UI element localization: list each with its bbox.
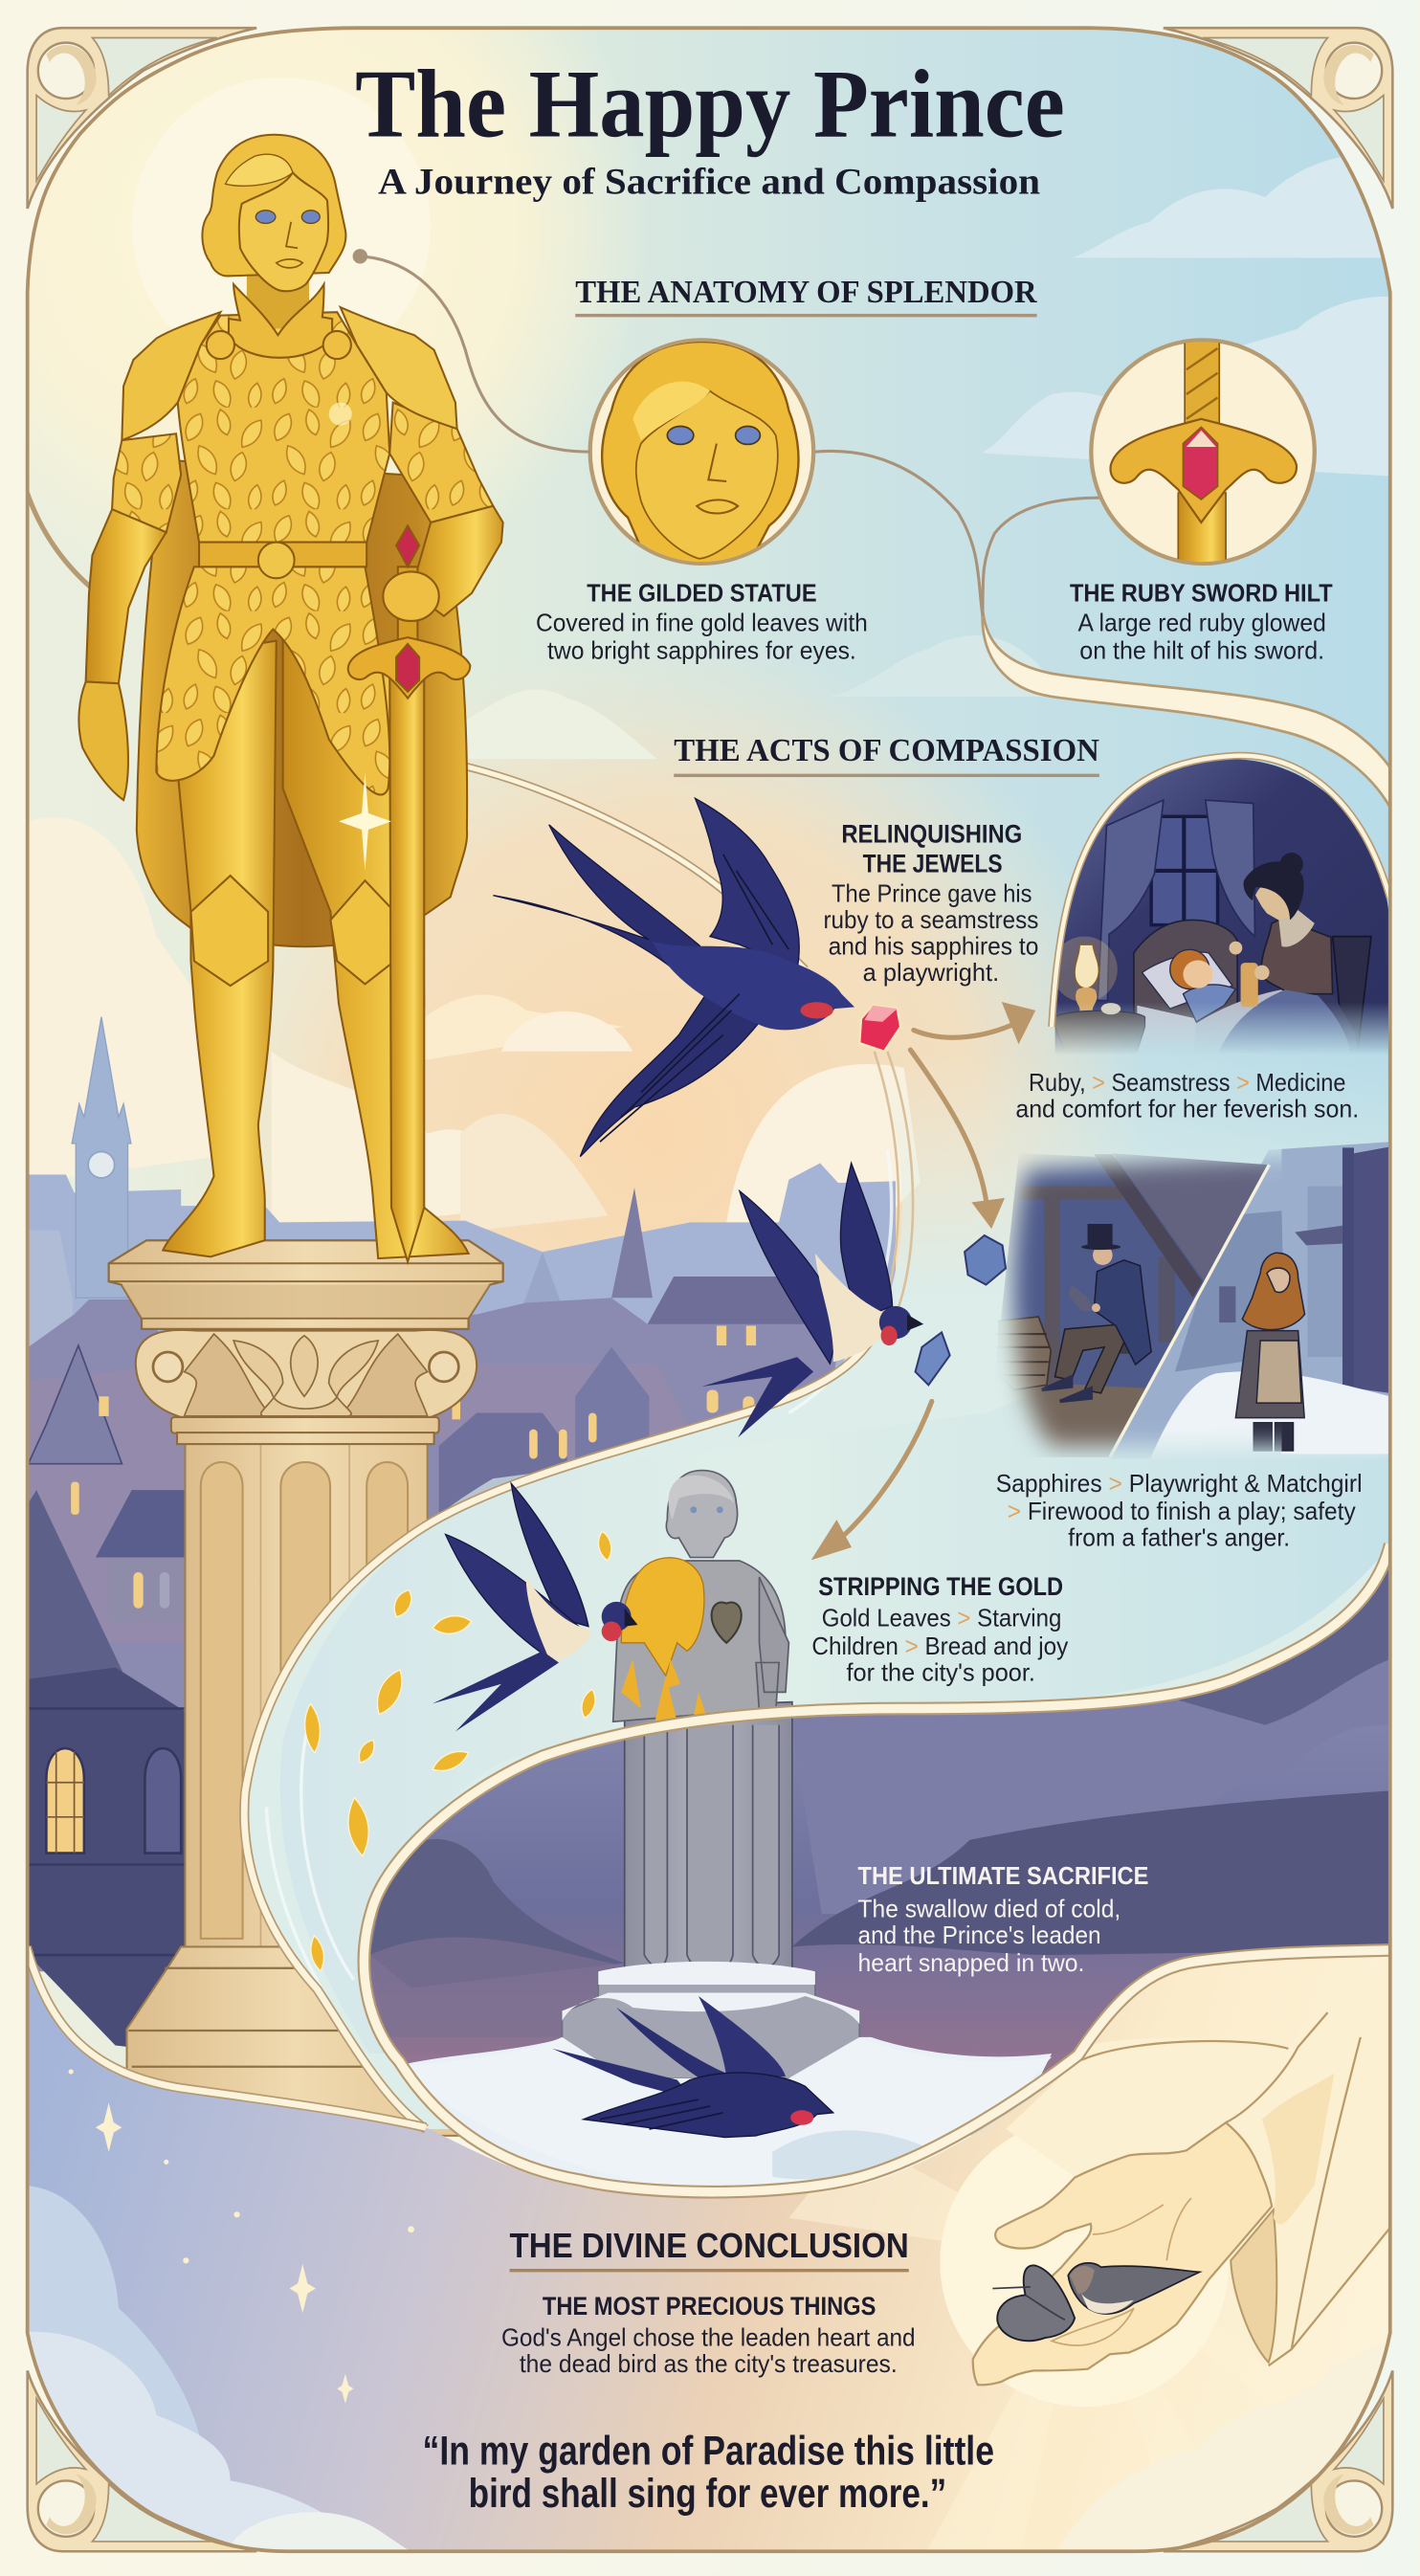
hair sweep (226, 154, 293, 186)
belt (199, 543, 366, 566)
mother dress (1261, 919, 1333, 994)
hanging sign (1295, 1226, 1342, 1245)
sword grip (398, 566, 417, 654)
horizontal beam (1019, 1187, 1122, 1199)
playwright trousers (1055, 1324, 1125, 1393)
bottom right ornament (1164, 2370, 1392, 2551)
text: relinquishing: RELINQUISHING (841, 820, 1022, 849)
snow drift (400, 2037, 1052, 2188)
cape (137, 460, 467, 946)
inner S ribbon (27, 1052, 1390, 2192)
playwright coat (1094, 1260, 1151, 1365)
medallion grip (1185, 337, 1219, 438)
sleeve fold (1231, 2210, 1276, 2363)
top hat (1088, 1224, 1113, 1247)
lower-left ribbon (27, 1946, 426, 2127)
books (996, 1317, 1051, 1389)
text: ruby sword hilt: THE RUBY SWORD HILT (1070, 580, 1333, 607)
right side houses (439, 1412, 567, 1627)
withered statue (400, 1471, 1052, 2188)
text: ruby result: and comfort for her feverish son. (1015, 1096, 1359, 1122)
pedestal (109, 1240, 503, 2136)
text: ruby result (1015, 1070, 1359, 1122)
medallion: gilded face (590, 340, 813, 566)
text: stripping the gold: for the city's poor. (846, 1659, 1035, 1686)
stars (69, 2069, 414, 2404)
city skyline (29, 1017, 896, 2054)
outer S ribbon (244, 1339, 871, 2129)
child (1183, 985, 1235, 1022)
street house (1175, 1210, 1285, 1372)
scene: seamstress (1052, 752, 1397, 1056)
boots (1254, 1423, 1272, 1451)
text: ruby sword hilt: on the hilt of his sword. (1079, 637, 1324, 664)
hair (202, 135, 345, 276)
far right building (1354, 1146, 1390, 1393)
apron (1256, 1341, 1301, 1403)
ruby trail lines (871, 1052, 913, 1339)
arrow to sapphires (910, 1050, 1001, 1224)
text: ruby result: Ruby, > Seamstress > Medicine (1029, 1070, 1345, 1097)
text: ruby sword hilt (1070, 580, 1333, 664)
right pauldron (341, 307, 457, 429)
swallow 1 (493, 798, 854, 1157)
capital (136, 1330, 477, 1417)
text: gilded statue (536, 580, 868, 664)
connector to face medallion (360, 256, 590, 452)
top slab (109, 1240, 503, 1329)
text: relinquishing: and his sapphires to (829, 933, 1038, 960)
hand creases (1052, 2198, 1191, 2345)
text: stripping the gold: Children > Bread and joy (811, 1633, 1068, 1660)
text: ultimate sacrifice: THE ULTIMATE SACRIFICE (858, 1863, 1148, 1890)
matchgirl (1235, 1253, 1304, 1451)
heading: anatomy: THE ANATOMY OF SPLENDOR (575, 274, 1038, 310)
text: ultimate sacrifice: The swallow died of cold, (858, 1897, 1120, 1923)
text: stripping the gold: STRIPPING THE GOLD (818, 1572, 1063, 1601)
playwright face (1093, 1245, 1113, 1265)
snow ground (1150, 1371, 1390, 1459)
bottom left ornament (28, 2370, 256, 2551)
lit windows (46, 1325, 756, 1854)
anatomy ribbon band (983, 610, 1393, 813)
heading: divine conclusion: THE DIVINE CONCLUSION (510, 2226, 909, 2265)
face (1267, 1268, 1290, 1292)
distant hills (788, 1561, 1390, 1914)
medallion face (636, 391, 778, 559)
dress (1235, 1331, 1304, 1418)
medallion nose and mouth (697, 444, 738, 514)
tall spire (611, 1188, 653, 1298)
garret wall (986, 1153, 1269, 1457)
text: ruby sword hilt: A large red ruby glowed (1078, 610, 1326, 636)
quote: bird shall sing for ever more.” (469, 2471, 946, 2517)
heavenly lower panel (16, 1943, 1407, 2563)
medallion: ruby sword (1091, 337, 1315, 566)
house gable (29, 1345, 122, 1464)
heart and dead bird in hand (992, 2263, 1200, 2341)
text: gilded statue: two bright sapphires for eyes. (547, 637, 856, 664)
torso (178, 312, 389, 543)
floor (986, 1380, 1147, 1457)
knee plates (190, 876, 268, 986)
feather lines (600, 855, 788, 1142)
left pauldron (122, 312, 220, 440)
column base (127, 1946, 463, 2136)
title: The Happy Prince (355, 50, 1065, 157)
heavenly clouds (16, 2185, 1407, 2563)
medallion hair (602, 342, 798, 566)
mid skyline (29, 1277, 841, 1971)
quote: “In my garden of Paradise this little (423, 2428, 994, 2474)
upper house (96, 1490, 186, 1558)
mother face (1255, 880, 1293, 920)
leaden heart (997, 2265, 1075, 2341)
right upper arm (389, 403, 493, 522)
lamp chimney (1075, 944, 1098, 988)
sword medallion connector (983, 498, 1099, 610)
golden statue (78, 135, 503, 1262)
snow (394, 2037, 1052, 2193)
playwright book and hands (1068, 1285, 1095, 1311)
text: sapphire result (996, 1471, 1363, 1552)
dusk scene (329, 1528, 1413, 2193)
left frame curve (27, 491, 96, 591)
mother collar (1278, 910, 1315, 947)
wind streaks (266, 1150, 892, 2103)
blanket (1193, 989, 1315, 1055)
top left ornament (28, 28, 256, 209)
bed sheet (1137, 1006, 1196, 1055)
connector band from statue (462, 766, 806, 969)
capital scroll shading (185, 1334, 428, 1416)
text: ultimate sacrifice: and the Prince's leaden (858, 1922, 1101, 1949)
left forearm (86, 509, 166, 683)
quote (423, 2428, 994, 2517)
tunic (156, 566, 389, 795)
swallow 2 (701, 1164, 923, 1437)
left hand (78, 681, 128, 800)
left upper arm (112, 433, 181, 532)
leaden heart (712, 1603, 742, 1643)
medallion eyes (667, 427, 694, 444)
sapphire gems (916, 1235, 1006, 1385)
sword hilt ruby (396, 644, 419, 692)
text: relinquishing: THE JEWELS (863, 850, 1003, 878)
text: ultimate sacrifice (858, 1863, 1148, 1977)
text: stripping the gold: Gold Leaves > Starving (822, 1606, 1061, 1632)
left leg (163, 641, 277, 1256)
top right ornament (1164, 28, 1392, 209)
text: sapphire result: from a father's anger. (1068, 1525, 1290, 1552)
light rays and hand glow (788, 2118, 1397, 2563)
right leg (283, 641, 469, 1258)
collar (229, 284, 332, 358)
text: sapphire result: > Firewood to finish a play; safety (1008, 1499, 1356, 1525)
text: most precious things (501, 2292, 916, 2378)
light cone (522, 1252, 562, 1306)
arrow to seamstress (914, 1006, 1032, 1038)
upper wood planks (1113, 1153, 1269, 1281)
upper wing (696, 798, 799, 969)
text: ultimate sacrifice: heart snapped in two. (858, 1950, 1084, 1977)
rafter (1094, 1154, 1203, 1298)
far skyline (29, 1164, 896, 1368)
text: most precious things: THE MOST PRECIOUS THINGS (543, 2292, 876, 2321)
text: most precious things: the dead bird as the city's treasures. (520, 2351, 898, 2378)
front building wall (29, 1668, 186, 2054)
remaining gold leaves (621, 1558, 704, 1676)
compassion light ribbon (244, 1052, 1390, 2129)
falling gold leaves (303, 1530, 613, 1972)
light rays from hand (788, 2136, 1397, 2563)
text: relinquishing: a playwright. (863, 960, 999, 987)
sword pommel ruby (396, 525, 419, 566)
sparkle (339, 772, 391, 871)
text: sapphire result: Sapphires > Playwright & Matchgirl (996, 1471, 1363, 1498)
room wall (1052, 752, 1397, 1056)
arrow to stripping (817, 1401, 932, 1556)
sleeve body (1006, 1950, 1397, 2365)
heading: acts: THE ACTS OF COMPASSION (674, 732, 1099, 768)
shoulder rondels (207, 331, 234, 359)
swallow 3 (433, 1483, 637, 1732)
mother dark skirt (1265, 986, 1356, 1055)
big house roof (648, 1277, 830, 1324)
mother skirt (1218, 989, 1351, 1055)
ruby gem (859, 1006, 900, 1052)
text: relinquishing: ruby to a seamstress (823, 907, 1038, 934)
mauve dusk wash (29, 1364, 690, 1643)
halo disc (132, 78, 431, 329)
warm clouds (29, 817, 921, 1249)
hood and shawl (1242, 1253, 1304, 1330)
diagonal split line (1110, 1165, 1269, 1457)
post (1045, 1199, 1060, 1387)
playwright shoes (1042, 1377, 1091, 1401)
body (653, 942, 854, 1030)
text: relinquishing (823, 820, 1038, 987)
face medallion connector (815, 451, 983, 616)
grey head (666, 1471, 738, 1558)
tail (493, 825, 723, 969)
medallion blade (1178, 493, 1226, 566)
neck (247, 271, 309, 328)
capital bands (171, 1417, 439, 1433)
lamp base (1076, 988, 1097, 1012)
text: most precious things: God's Angel chose the leaden heart and (501, 2325, 916, 2352)
connector dot (353, 249, 367, 264)
column flutes (201, 1462, 408, 1939)
hand (973, 2122, 1272, 2385)
right forearm (411, 506, 503, 616)
text: stripping the gold (811, 1572, 1068, 1686)
sword blade (389, 665, 424, 1262)
text: gilded statue: THE GILDED STATUE (587, 580, 817, 607)
hand glow disc (940, 2118, 1230, 2407)
sleeve of angel (973, 1950, 1397, 2385)
bench (1104, 1344, 1150, 1354)
throat (800, 1002, 833, 1018)
text: gilded statue: Covered in fine gold leaves with (536, 610, 868, 636)
side table (1055, 1010, 1144, 1052)
motion arrows (817, 1006, 1032, 1556)
grey pillar (625, 1702, 792, 1971)
sword crossguard (348, 637, 470, 699)
face (239, 172, 328, 291)
dead bird body (1068, 2263, 1200, 2314)
bottle (1241, 963, 1258, 1007)
scene: playwright and matchgirl (986, 1142, 1390, 1459)
sleeve highlight (1262, 2074, 1334, 2224)
mother hair (1244, 861, 1304, 920)
arch ribbon (1052, 756, 1390, 1027)
bed headboard (1134, 920, 1237, 1035)
fist (383, 571, 439, 621)
text: relinquishing: The Prince gave his (832, 881, 1032, 908)
dead swallow (552, 1996, 833, 2138)
snowy street background (1109, 1142, 1390, 1459)
grey pedestal base (562, 1971, 859, 2078)
capital fleur (233, 1336, 378, 1416)
mother chair (1333, 937, 1371, 1055)
street tower (1307, 1187, 1343, 1357)
subtitle: A Journey of Sacrifice and Compassion (378, 161, 1040, 203)
grey torso (613, 1561, 786, 1721)
statue halo glow (29, 30, 613, 497)
left pale building (29, 1231, 73, 1364)
statue eyes (255, 211, 320, 268)
body sparkle (329, 403, 352, 426)
window (1151, 816, 1218, 925)
medallion ruby (1183, 427, 1218, 500)
clock tower (72, 1017, 131, 1298)
lower wing (580, 969, 772, 1157)
pillow (1143, 952, 1232, 1009)
grey arm and staff (756, 1577, 788, 1712)
curtains (1098, 800, 1164, 1001)
sky clouds (460, 154, 1397, 759)
lamp glow (1052, 937, 1118, 1002)
warm horizon glow (259, 694, 1115, 1269)
column shaft (185, 1442, 428, 1955)
medallion crossguard (1111, 419, 1297, 522)
dark upper gable (29, 1490, 127, 1692)
